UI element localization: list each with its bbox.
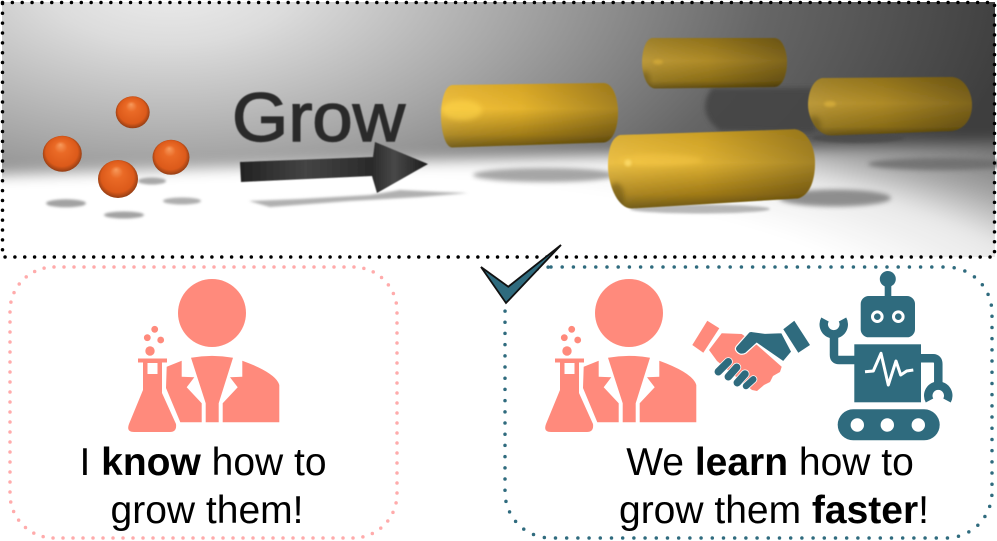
text: We learn how to grow them faster: grow them faster! [619,489,929,532]
right panel dotted border [505,267,992,538]
arrow: grow [240,142,428,193]
text: We learn how to grow them faster: We learn how to [626,441,914,484]
panel: I know [10,267,397,538]
icon: robot [824,271,948,440]
text: I know how to grow them: grow them! [111,489,303,532]
icon: scientist [545,279,696,432]
scene dotted frame [2,2,994,257]
icon: handshake [692,321,810,391]
left panel dotted border [10,267,397,538]
spheres [43,96,189,198]
panel: We learn [505,267,992,538]
icon: scientist [128,279,279,432]
icon: check mark [481,245,561,303]
text: I know how to grow them: I know how to [79,441,327,484]
capsules: rod-shaped particles [441,38,972,209]
heading: Grow: Grow [232,79,405,156]
panel: growth scene [0,0,997,259]
floor [2,135,995,257]
wall and floor shadows [46,88,997,218]
